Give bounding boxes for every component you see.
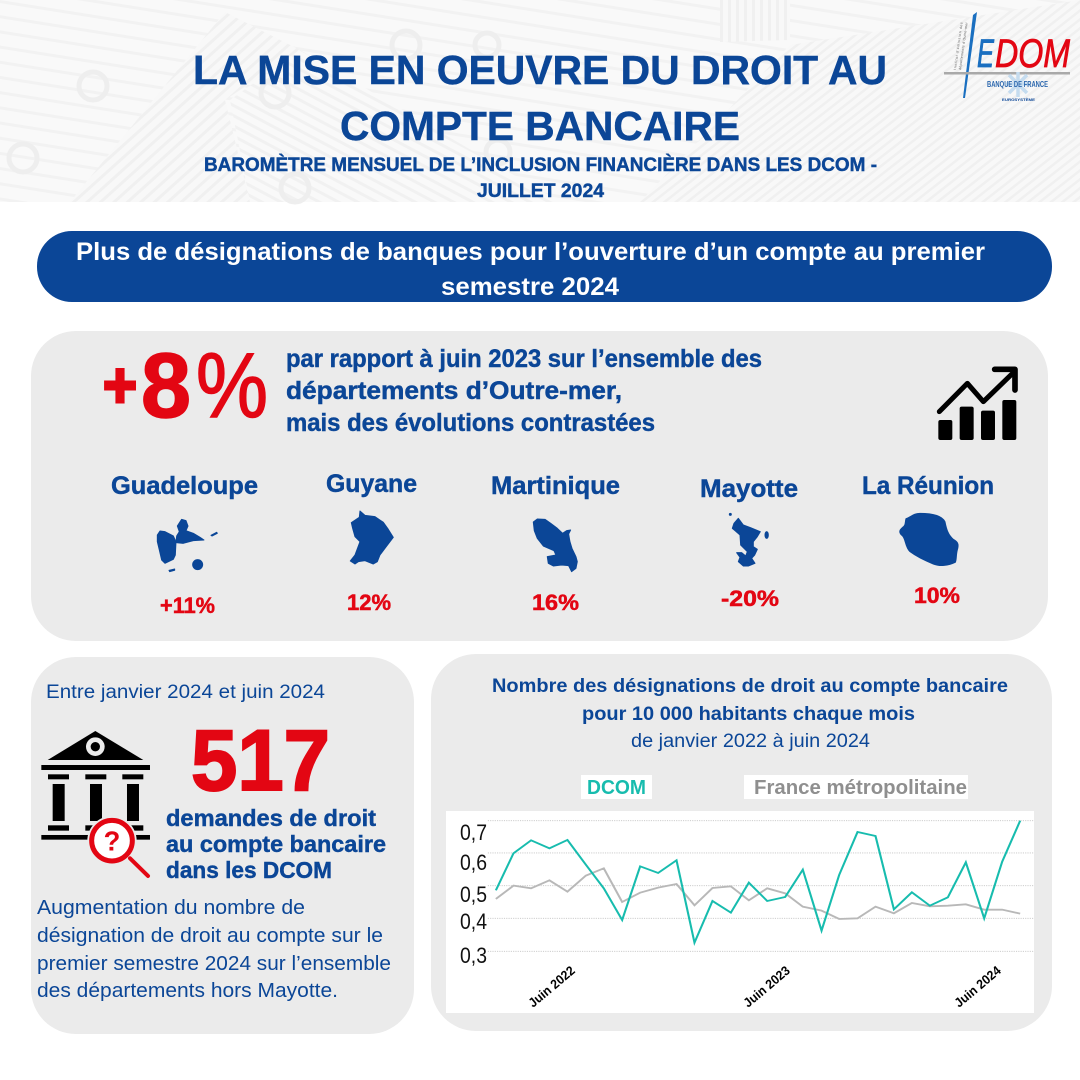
line: France métropolitaine (496, 868, 1020, 919)
+8% figure (103, 335, 268, 437)
Martinique: 16% (532, 590, 579, 615)
Mayotte (700, 475, 798, 611)
logo: IEDOM: Institut d’émission des (953, 22, 964, 70)
y axis labels (460, 820, 487, 968)
subtitle: BAROMÈTRE MENSUEL DE L’INCLUSION FINANCIÈRE DANS LES DCOM - (204, 154, 877, 176)
title: COMPTE BANCAIRE (340, 103, 740, 149)
Guadeloupe: +11% (160, 593, 215, 618)
y axis labels: 0,4 (460, 909, 487, 934)
x axis labels: Juin 2022 (525, 963, 578, 1010)
legend: DCOM: DCOM (587, 777, 646, 799)
banner (37, 231, 1052, 302)
header background pattern (0, 0, 1080, 202)
subtitle: JUILLET 2024 (477, 181, 604, 202)
Mayotte: Mayotte (700, 475, 798, 503)
text: augmentation: des départements hors Mayotte. (37, 980, 338, 1002)
title: LA MISE EN OEUVRE DU DROIT AU (193, 47, 887, 93)
panel: évolution par département (31, 331, 1048, 641)
La Réunion: 10% (914, 583, 960, 608)
text: par rapport à juin 2023: par rapport à juin 2023 sur l’ensemble des (286, 345, 762, 373)
icon: bank with magnifier (41, 731, 150, 876)
Guadeloupe (111, 472, 258, 618)
text: augmentation: désignation de droit au compte sur le (37, 925, 383, 947)
icon: bank with magnifier: ? (104, 826, 120, 857)
text: demandes de droit: dans les DCOM (166, 857, 332, 883)
Martinique: Martinique (491, 472, 620, 500)
x axis labels (525, 962, 1004, 1010)
text: par rapport à juin 2023: départements d’Outre-mer, (286, 377, 622, 405)
y axis labels: 0,5 (460, 882, 487, 907)
logo: IEDOM (944, 12, 1071, 102)
Mayotte: -20% (721, 586, 779, 611)
subtitle (204, 154, 877, 202)
chart title: pour 10 000 habitants chaque mois (582, 704, 915, 725)
text: demandes de droit: au compte bancaire (166, 831, 386, 857)
logo: IEDOM: E (977, 32, 995, 76)
banner: semestre 2024 (441, 273, 619, 301)
panel: line chart (431, 654, 1052, 1031)
Guyane: 12% (347, 590, 391, 615)
logo: IEDOM: départements d’Outre-mer (958, 21, 969, 70)
logo: IEDOM: BANQUE DE FRANCE (987, 80, 1048, 89)
period label: Entre janvier 2024 et juin 2024 (46, 682, 325, 703)
La Réunion: La Réunion (862, 472, 994, 500)
x axis labels: Juin 2023 (740, 963, 793, 1010)
Guadeloupe: Guadeloupe (111, 472, 258, 500)
Guyane: Guyane (326, 470, 417, 498)
y axis labels: 0,3 (460, 943, 487, 968)
text: par rapport à juin 2023: mais des évolutions contrastées (286, 409, 655, 437)
text: augmentation (37, 897, 391, 1002)
+8% figure: % (196, 335, 268, 437)
chart title: de janvier 2022 à juin 2024 (631, 731, 870, 752)
text: par rapport à juin 2023 (286, 345, 762, 437)
x axis labels: Juin 2024 (951, 962, 1004, 1010)
title (193, 47, 887, 149)
La Réunion (862, 472, 994, 608)
Martinique (491, 472, 620, 615)
text: augmentation: premier semestre 2024 sur l’ensemble (37, 953, 391, 975)
text: demandes de droit (166, 805, 386, 883)
Guyane (326, 470, 417, 615)
banner: Plus de désignations de banques pour l’ouverture d’un compte au premier (76, 238, 985, 266)
y axis labels: 0,7 (460, 820, 487, 845)
chart title: Nombre des désignations de droit au compte bancaire (492, 676, 1008, 697)
legend: France métropolitaine: France métropolitaine (754, 777, 967, 799)
+8% figure: 8 (141, 335, 191, 437)
y axis labels: 0,6 (460, 850, 487, 875)
text: demandes de droit: demandes de droit (166, 805, 376, 831)
+8% figure: + (103, 349, 137, 421)
panel: 517 demandes (31, 657, 414, 1034)
line: DCOM (496, 821, 1020, 943)
chart title (492, 676, 1008, 752)
chart area (446, 811, 1034, 1013)
logo: IEDOM: EUROSYSTÈME (1002, 97, 1035, 102)
icon: rising bar chart (938, 369, 1016, 440)
figure: 517: 517 (191, 713, 330, 809)
text: augmentation: Augmentation du nombre de (37, 897, 305, 919)
